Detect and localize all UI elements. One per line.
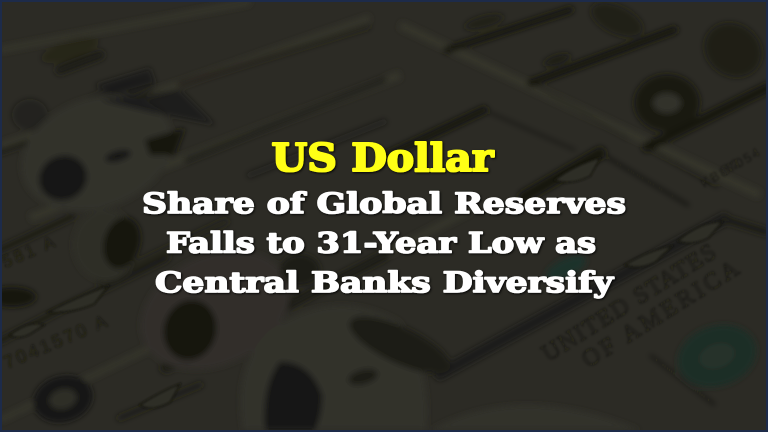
portraits left [5, 68, 640, 430]
bill serial numbers and engraved lettering: B2 [719, 155, 744, 178]
green treasury seal [542, 251, 764, 405]
dark bands, right bills [384, 10, 767, 205]
title: US Dollar: US Dollar [272, 135, 495, 180]
subtitle line 3: Central Banks Diversify [155, 266, 614, 299]
subtitle line 2: Falls to 31-Year Low as [166, 226, 596, 260]
bill serial numbers and engraved lettering: UNITED STATES [537, 239, 721, 367]
subtitle line 1: Share of Global Reserves [142, 187, 626, 220]
bill serial numbers and engraved lettering [0, 144, 764, 373]
scalloped bill ornaments [10, 158, 722, 408]
lower left seals [0, 287, 98, 429]
bill serial numbers and engraved lettering: 7041570 A [1, 310, 113, 373]
bill serial numbers and engraved lettering: KB87054 [698, 144, 764, 191]
bill serial numbers and engraved lettering: OF AMERICA [577, 255, 744, 373]
bill serial numbers and engraved lettering: 581 A [0, 231, 60, 272]
headline block [142, 135, 626, 299]
top banknote faces and seals [12, 0, 768, 132]
